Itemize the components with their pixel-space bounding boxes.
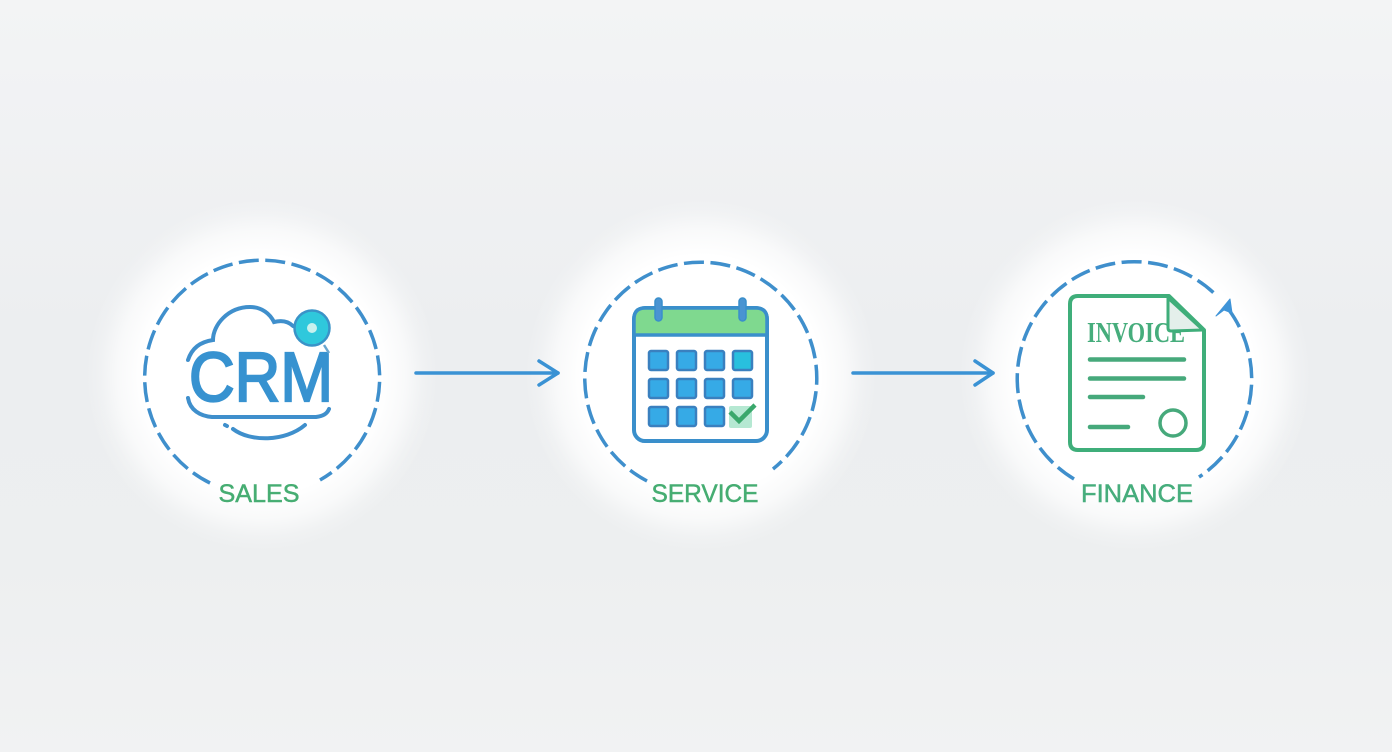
label: service: SERVICE <box>652 480 758 508</box>
icon: ring arrowhead <box>1216 299 1232 316</box>
icon: CRM cloud <box>188 307 333 438</box>
dashed ring: finance <box>1017 262 1252 479</box>
text lines <box>1090 360 1184 427</box>
dashed ring: sales <box>145 260 380 483</box>
day grid <box>649 351 752 426</box>
dashed ring: service <box>585 262 817 481</box>
arrow: sales to service <box>416 361 558 385</box>
label: sales: SALES <box>218 480 300 508</box>
node: teal dot <box>294 310 330 353</box>
invoice heading: INVOICE <box>1087 317 1185 349</box>
page fold <box>1168 298 1203 331</box>
arrow: service to finance <box>853 361 993 385</box>
seal <box>1160 410 1186 436</box>
icon: CRM cloud: CRM <box>189 338 333 416</box>
panel: service <box>585 262 817 508</box>
icon: invoice document <box>1070 296 1204 450</box>
panel: sales <box>145 260 380 508</box>
label: finance: FINANCE <box>1081 480 1193 508</box>
check mark <box>729 405 755 428</box>
icon: calendar <box>634 298 767 441</box>
panel: finance <box>1017 262 1252 508</box>
